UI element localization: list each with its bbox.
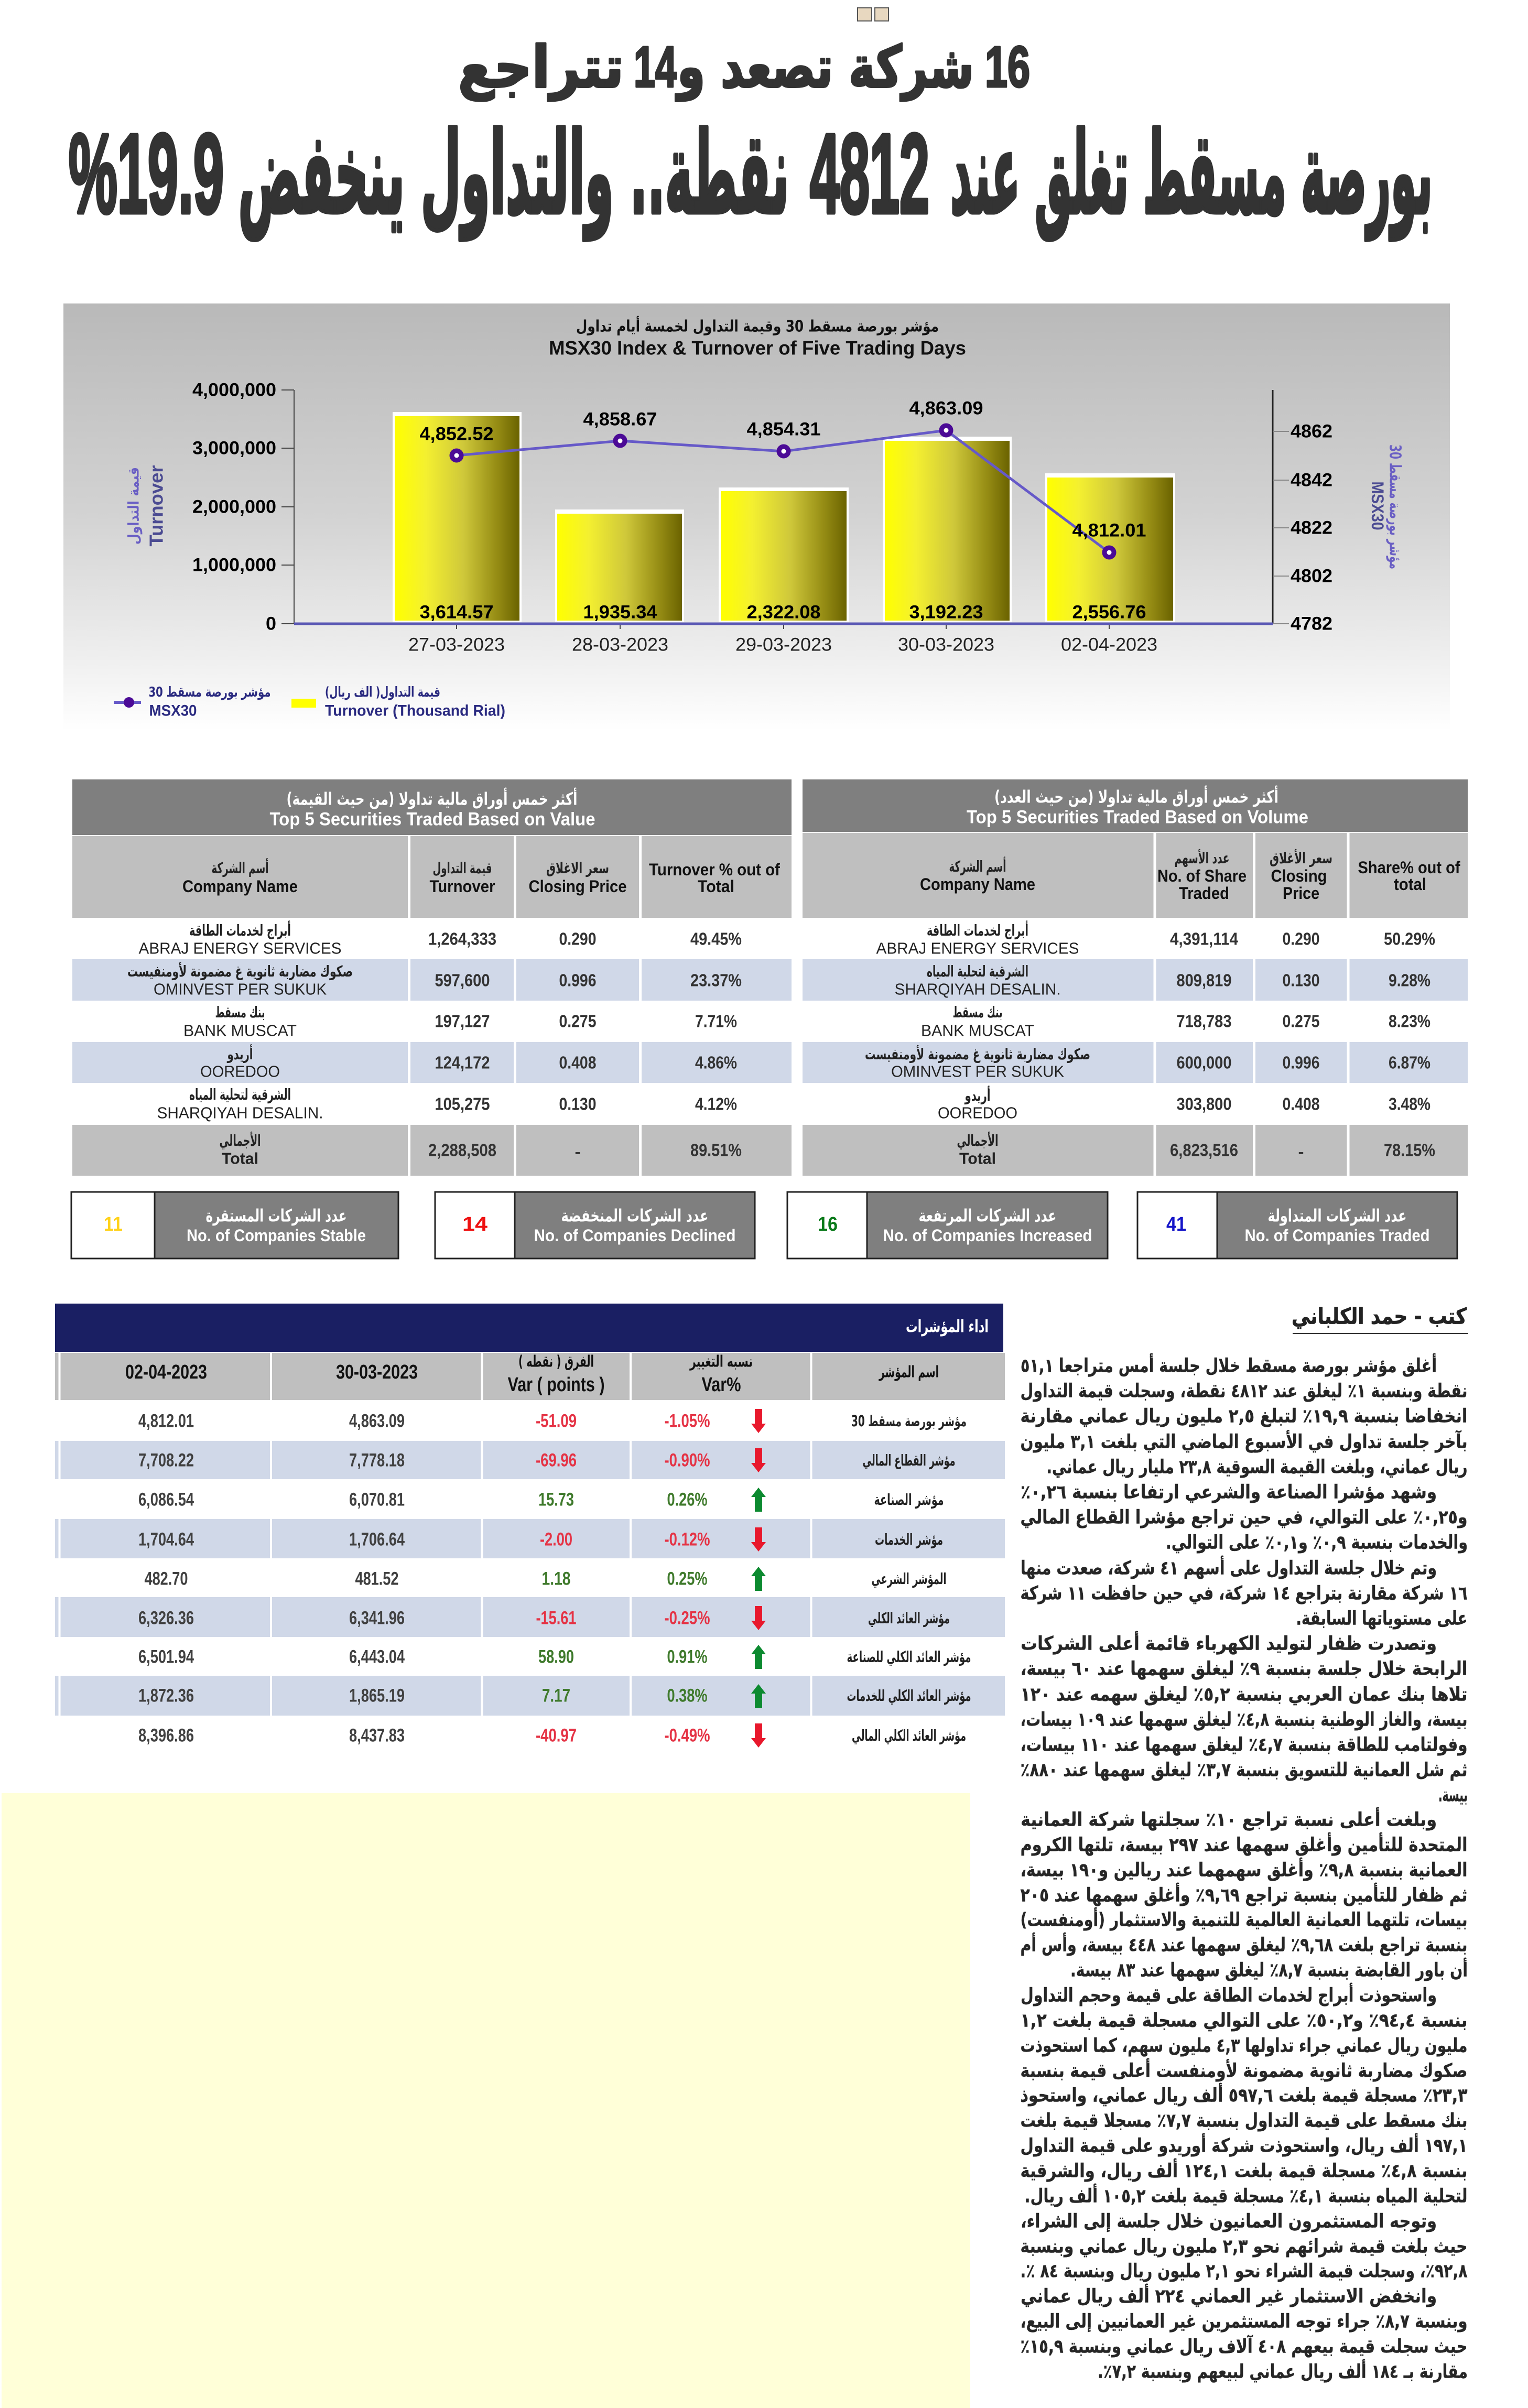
table title: Top 5 Securities Traded Based on Value xyxy=(269,809,595,829)
percent variation positive xyxy=(667,1490,708,1706)
icons: down arrows xyxy=(751,1409,766,1748)
legend: turnover: Turnover (Thousand Rial) xyxy=(325,702,505,719)
column headers arabic: قيمة التداول xyxy=(433,859,492,877)
values: 124,172 xyxy=(435,1053,490,1072)
stat box: companies increased: 16 xyxy=(818,1213,838,1235)
article text: first column block: تلاها بنك عمان العربي بنسبة ٥,٢٪ ليغلق سهمه عند ١٢٠ xyxy=(1020,1684,1468,1706)
points variation negative: -69.96 xyxy=(536,1450,577,1471)
title: headline line one: تتراجع xyxy=(458,34,624,101)
values: 0.290 xyxy=(559,929,597,949)
values: - xyxy=(1298,1142,1304,1162)
company names english: BANK MUSCAT xyxy=(921,1021,1034,1040)
values: 0.130 xyxy=(559,1094,597,1113)
article text: first column block: انخفاضا بنسبة ١٩,٩٪ لتبلغ ٢,٥ مليون ريال عماني مقارنة xyxy=(1021,1406,1468,1427)
icon: top ornament xyxy=(858,8,888,21)
right axis labels: 4842 xyxy=(1291,470,1332,491)
column headers: Total xyxy=(698,877,734,896)
column headers arabic xyxy=(212,858,609,877)
article text: first column block: على مستوياتها السابقة. xyxy=(1296,1608,1468,1629)
column headers arabic: عدد الأسهم xyxy=(1174,849,1230,867)
company names arabic: الأجمالي xyxy=(957,1131,998,1149)
column headers: total xyxy=(1394,875,1426,894)
panel: pale yellow block xyxy=(2,1793,970,2408)
index names: مؤشر العائد الكلي للخدمات xyxy=(847,1687,971,1705)
values: 303,800 xyxy=(1176,1094,1232,1113)
article text: second block: ١٩٧,١ ألف ريال، واستحوذت شركة أوريدو على قيمة التداول xyxy=(1020,2133,1468,2156)
values 02-04-2023: 7,708.22 xyxy=(138,1450,194,1471)
article text: second block: ثم ظفار للتأمين بنسبة تراجع ٩,٦٩٪ وأغلق سهمها عند ٢٠٥ xyxy=(1020,1883,1468,1906)
column headers: نسبه التغيير xyxy=(689,1352,753,1371)
stat box: companies stable: No. of Companies Stable xyxy=(187,1226,366,1245)
values 02-04-2023: 1,704.64 xyxy=(138,1530,194,1549)
company names arabic: أريدو xyxy=(964,1086,991,1104)
article text: second block: ٢٣,٣٪ مسجلة قيمة بلغت ٥٩٧,٦ ألف ريال عماني، واستحوذ xyxy=(1020,2083,1468,2106)
stat box: companies declined: 14 xyxy=(462,1213,487,1235)
values 02-04-2023: 6,326.36 xyxy=(138,1608,194,1628)
company names english xyxy=(876,939,1079,1168)
column headers: Company Name xyxy=(920,875,1035,894)
percent variation positive: 0.26% xyxy=(667,1490,708,1510)
points variation negative xyxy=(536,1411,577,1745)
company names arabic: أبراج لخدمات الطاقة xyxy=(927,920,1028,939)
company names english: ABRAJ ENERGY SERVICES xyxy=(138,939,342,957)
values xyxy=(1170,929,1435,1162)
column headers: Traded xyxy=(1179,884,1229,903)
points variation positive: 58.90 xyxy=(538,1647,574,1667)
article text: second block: ٩٢,٨٪، وسجلت قيمة الشراء نحو ٢,١ مليون ريال وبنسبة ٨٤ ٪. xyxy=(1020,2260,1468,2282)
company names english: OMINVEST PER SUKUK xyxy=(891,1062,1064,1081)
values: 105,275 xyxy=(435,1094,490,1113)
article text: second block: وبلغت أعلى نسبة تراجع ١٠٪ سجلتها شركة العمانية xyxy=(1021,1807,1437,1830)
stat box: companies declined xyxy=(435,1192,755,1259)
company names english xyxy=(138,939,342,1168)
values: 6,823,516 xyxy=(1170,1141,1238,1159)
company names english: Total xyxy=(959,1149,996,1168)
table title xyxy=(269,787,595,829)
company names english: SHARQIYAH DESALIN. xyxy=(894,980,1061,998)
stat box: companies traded xyxy=(1137,1192,1457,1259)
turnover value labels: 3,614.57 xyxy=(419,602,494,623)
turnover value labels: 1,935.34 xyxy=(583,602,657,623)
company names arabic xyxy=(865,920,1090,1149)
article text: second block: المتحدة للتأمين وأغلق سهمها عند ٢٩٧ بيسة، تلتها الكروم xyxy=(1020,1832,1468,1856)
title: headline line one: 16 xyxy=(985,35,1030,100)
values: 78.15% xyxy=(1384,1141,1435,1159)
values: 718,783 xyxy=(1176,1012,1232,1031)
date labels: 28-03-2023 xyxy=(572,634,668,655)
article text: second block: وتوجه المستثمرون العمانيون خلال جلسة إلى الشراء، xyxy=(1021,2211,1437,2232)
article text: first column block: بيسة، والغاز الوطنية بنسبة ٤,٨٪ ليغلق سهمها عند ١٠٩ بيسات، xyxy=(1020,1709,1468,1731)
title: headline line one xyxy=(458,34,1030,101)
values: 3.48% xyxy=(1389,1094,1431,1113)
values: 0.408 xyxy=(1282,1094,1320,1113)
percent variation negative xyxy=(665,1411,710,1745)
column headers arabic: سعر الاغلاق xyxy=(546,859,609,877)
points variation positive xyxy=(538,1490,574,1706)
values 30-03-2023: 4,863.09 xyxy=(349,1411,405,1431)
values 30-03-2023: 8,437.83 xyxy=(349,1726,405,1745)
date labels: 30-03-2023 xyxy=(898,634,994,655)
right axis title: MSX30 xyxy=(1368,481,1387,530)
title: headline line one: 14 xyxy=(634,35,677,100)
stat box: companies declined: عدد الشركات المنخفضة xyxy=(561,1206,709,1227)
values: 4.12% xyxy=(695,1094,737,1113)
company names arabic: أبراج لخدمات الطاقة xyxy=(189,920,291,939)
points variation negative: -40.97 xyxy=(536,1726,577,1745)
article text: first column block: والخدمات بنسبة ٠,٩٪ و٠,١٪ على التوالي. xyxy=(1166,1532,1468,1554)
values 02-04-2023 xyxy=(138,1411,194,1745)
values: 50.29% xyxy=(1384,929,1435,949)
left axis labels: 3,000,000 xyxy=(192,438,276,458)
bar: 27-03-2023 xyxy=(393,412,522,622)
index value labels xyxy=(419,398,1146,541)
points variation positive: 1.18 xyxy=(542,1568,570,1589)
right axis title: مؤشر بورصة مسقط 30 xyxy=(1386,444,1404,569)
values 30-03-2023: 6,443.04 xyxy=(349,1647,405,1667)
article text: first column block: نقطة وبنسبة ١٪ ليغلق عند ٤٨١٢ نقطة، وسجلت قيمة التداول xyxy=(1020,1381,1468,1402)
legend: turnover xyxy=(291,685,505,719)
percent variation positive: 0.91% xyxy=(667,1647,708,1667)
date labels: 27-03-2023 xyxy=(408,634,505,655)
column headers arabic: أسم الشركة xyxy=(212,858,268,877)
article text: first column block: ١٦ شركة مقارنة بتراجع ١٤ شركة، في حين حافظت ١١ شركة xyxy=(1020,1583,1468,1604)
values: 6.87% xyxy=(1389,1053,1431,1072)
values 02-04-2023: 4,812.01 xyxy=(138,1411,194,1431)
table title: أكثر خمس أوراق مالية تداولا (من حيث القيمة) xyxy=(286,787,578,809)
column headers: Turnover % out of xyxy=(649,860,780,879)
values: 0.130 xyxy=(1282,971,1320,990)
panel: top 5 by value table xyxy=(72,779,792,1176)
article text: second block: بنسبة تراجع بلغت ٩,٦٨٪ ليغلق سهمها عند ٤٤٨ بيسة، وأس أم xyxy=(1020,1932,1468,1956)
right axis labels: 4802 xyxy=(1291,566,1332,586)
company names english: BANK MUSCAT xyxy=(183,1021,297,1040)
chart title xyxy=(549,316,966,359)
column headers: 02-04-2023 xyxy=(125,1361,207,1383)
column headers: Var ( points ) xyxy=(507,1374,605,1396)
index value labels: 4,863.09 xyxy=(909,398,983,418)
stat box: companies traded: عدد الشركات المتداولة xyxy=(1267,1206,1407,1227)
stat box: companies increased: No. of Companies Increased xyxy=(883,1226,1092,1245)
values: 4.86% xyxy=(695,1053,737,1072)
company names arabic: بنك مسقط xyxy=(215,1003,265,1021)
company names arabic: بنك مسقط xyxy=(953,1003,1002,1021)
values: 49.45% xyxy=(690,929,742,949)
column headers: Turnover xyxy=(430,877,495,896)
values 30-03-2023 xyxy=(349,1411,405,1745)
article text: second block: وانخفض الاستثمار غير العماني ٢٢٤ ألف ريال عماني xyxy=(1021,2283,1437,2307)
right axis labels xyxy=(1291,421,1332,634)
turnover value labels: 2,556.76 xyxy=(1072,602,1146,623)
left axis labels: 1,000,000 xyxy=(192,555,276,576)
values: 89.51% xyxy=(690,1141,742,1159)
values 30-03-2023: 481.52 xyxy=(355,1568,398,1589)
column headers: الفرق ( نقطه ) xyxy=(518,1352,594,1371)
company names english: SHARQIYAH DESALIN. xyxy=(157,1104,323,1122)
values: 0.290 xyxy=(1282,929,1320,949)
index value labels: 4,812.01 xyxy=(1072,520,1146,541)
article text: first column block: بيسة. xyxy=(1438,1784,1468,1806)
percent variation negative: -1.05% xyxy=(665,1411,710,1431)
panel: top 5 by volume table xyxy=(803,779,1468,1176)
chart axes xyxy=(281,390,1289,629)
values 02-04-2023: 8,396.86 xyxy=(138,1726,194,1745)
bar: 29-03-2023 xyxy=(719,487,849,622)
values xyxy=(428,929,742,1162)
left axis labels: 4,000,000 xyxy=(192,379,276,400)
turnover value labels: 3,192.23 xyxy=(909,602,983,623)
chart title: MSX30 Index & Turnover of Five Trading Days xyxy=(549,338,966,359)
values: 1,264,333 xyxy=(428,929,496,949)
index value labels: 4,852.52 xyxy=(419,424,494,444)
values: 4,391,114 xyxy=(1170,929,1239,949)
legend: turnover: قيمة التداول( الف ريال) xyxy=(325,685,440,700)
article text: first column block: الرابحة خلال جلسة بنسبة ٩٪ ليغلق سهمها عند ٦٠ بيسة، xyxy=(1020,1658,1468,1679)
table title: اداء المؤشرات xyxy=(906,1316,989,1337)
date labels xyxy=(408,634,1157,655)
index names: مؤشر العائد الكلي المالي xyxy=(852,1727,966,1744)
company names arabic: صكوك مضاربة ثانوية غ مضمونة لأومنفيست xyxy=(865,1045,1090,1063)
points variation negative: -2.00 xyxy=(540,1530,572,1549)
legend: MSX30 xyxy=(114,685,270,719)
article text: first column block: وفولتامب للطاقة بنسبة ٤,٧٪ ليغلق سهمها عند ١١٠ بيسات، xyxy=(1020,1734,1468,1756)
index value labels: 4,858.67 xyxy=(583,409,657,430)
values: 0.275 xyxy=(1282,1012,1320,1031)
turnover value labels xyxy=(419,602,1146,623)
points variation positive: 15.73 xyxy=(538,1490,574,1510)
percent variation negative: -0.12% xyxy=(665,1530,710,1549)
column headers xyxy=(920,858,1460,903)
column headers arabic xyxy=(949,849,1332,875)
article text: second block: لتحلية المياه بنسبة ٤,١٪ مسجلة قيمة بلغت ١٠٥,٢ ألف ريال. xyxy=(1024,2184,1468,2207)
column headers: 30-03-2023 xyxy=(336,1361,418,1383)
values: 197,127 xyxy=(435,1012,490,1031)
date labels: 02-04-2023 xyxy=(1061,634,1157,655)
article text: first column block: ثم شل العمانية للتسويق بنسبة ٣,٧٪ ليغلق سهمها عند ٨٨٠٪ xyxy=(1021,1759,1468,1781)
left axis labels xyxy=(192,379,276,634)
company names english: OOREDOO xyxy=(200,1062,280,1081)
values: 597,600 xyxy=(435,971,490,990)
table title: أكثر خمس أوراق مالية تداولا (من حيث العدد) xyxy=(994,785,1278,807)
values 30-03-2023: 7,778.18 xyxy=(349,1450,405,1471)
icons: up arrows xyxy=(751,1488,766,1708)
values 02-04-2023: 6,086.54 xyxy=(138,1490,194,1510)
percent variation negative: -0.25% xyxy=(665,1608,710,1628)
stat box: companies stable xyxy=(71,1192,398,1259)
stat box: companies traded: No. of Companies Traded xyxy=(1244,1226,1430,1245)
bar: 02-04-2023 xyxy=(1045,473,1175,622)
values: 8.23% xyxy=(1389,1012,1431,1031)
article text: first column block: أغلق مؤشر بورصة مسقط خلال جلسة أمس متراجعا ٥١,١ xyxy=(1021,1353,1437,1376)
bar: 30-03-2023 xyxy=(883,437,1012,622)
index names xyxy=(847,1412,971,1744)
column headers: Share% out of xyxy=(1358,858,1460,877)
points variation negative: -51.09 xyxy=(536,1411,577,1431)
column headers: No. of Share xyxy=(1157,866,1247,885)
company names arabic: الشرقية لتحلية المياه xyxy=(189,1086,291,1103)
right axis labels: 4822 xyxy=(1291,518,1332,538)
values: 0.408 xyxy=(559,1053,597,1072)
values: 0.996 xyxy=(559,971,597,990)
article text: second block: مقارنة بـ ١٨٤ ألف ريال عماني لبيعهم وبنسبة ٧,٢٪. xyxy=(1098,2359,1468,2383)
stat box: companies increased xyxy=(787,1192,1108,1259)
right axis labels: 4782 xyxy=(1291,613,1332,634)
table title: Top 5 Securities Traded Based on Volume xyxy=(967,807,1308,827)
table title xyxy=(967,785,1308,827)
index names: مؤشر الخدمات xyxy=(875,1531,943,1548)
column headers xyxy=(125,1352,939,1396)
values 02-04-2023: 482.70 xyxy=(145,1568,188,1589)
percent variation negative: -0.90% xyxy=(665,1450,710,1471)
values 02-04-2023: 6,501.94 xyxy=(138,1647,194,1667)
company names english: OMINVEST PER SUKUK xyxy=(154,980,327,998)
column headers: Closing Price xyxy=(528,877,627,896)
article text: first column block xyxy=(1020,1353,1468,1806)
article text: second block: وبنسبة ٨,٧٪ جراء توجه المستثمرين غير العمانيين إلى البيع، xyxy=(1020,2311,1468,2333)
article text: second block: بنسبة ٩٤,٤٪ و٥٠,٢٪ على التوالي مسجلة قيمة بلغت ١,٢ xyxy=(1020,2010,1468,2032)
percent variation positive: 0.38% xyxy=(667,1686,708,1706)
company names arabic: الأجمالي xyxy=(219,1131,261,1149)
legend: MSX30: مؤشر بورصة مسقط 30 xyxy=(148,685,270,700)
stat box: companies traded: 41 xyxy=(1166,1213,1186,1235)
article text: second block xyxy=(1020,1807,1468,2383)
stat box: companies declined: No. of Companies Declined xyxy=(534,1226,736,1245)
company names english: OOREDOO xyxy=(938,1104,1017,1122)
company names arabic: الشرقية لتحلية المياه xyxy=(927,962,1028,980)
date labels: 29-03-2023 xyxy=(735,634,832,655)
article text: first column block: و٠,٢٥٪ على التوالي، في حين تراجع مؤشرا القطاع المالي xyxy=(1020,1506,1468,1528)
values 30-03-2023: 6,070.81 xyxy=(349,1490,405,1510)
index names: المؤشر الشرعي xyxy=(871,1570,947,1588)
values: 2,288,508 xyxy=(428,1141,496,1159)
index names: مؤشر العائد الكلي للصناعة xyxy=(847,1648,971,1666)
values: 0.275 xyxy=(559,1012,597,1031)
company names english: ABRAJ ENERGY SERVICES xyxy=(876,939,1079,957)
article text: first column block: وتم خلال جلسة التداول على أسهم ٤١ شركة، صعدت منها xyxy=(1021,1556,1437,1579)
column headers: Var% xyxy=(701,1374,741,1396)
company names arabic xyxy=(127,920,353,1149)
panel: indices performance table xyxy=(55,1304,1005,1754)
article text: second block: حيث سجلت قيمة بيعهم ٤٠٨ آلاف ريال عماني وبنسبة ١٥,٩٪ xyxy=(1020,2335,1468,2358)
article text: second block: مليون ريال عماني جراء تداولها ٤,٣ مليون سهم، كما استحوذت xyxy=(1020,2035,1468,2057)
panel: MSX30 chart xyxy=(63,303,1450,731)
column headers xyxy=(182,860,780,896)
index names: مؤشر العائد الكلي xyxy=(868,1609,950,1627)
values: 23.37% xyxy=(690,971,742,990)
company names arabic: صكوك مضاربة ثانوية غ مضمونة لأومنفيست xyxy=(127,962,353,980)
article text: second block: حيث بلغت قيمة شرائهم نحو ٢,٣ مليون ريال عماني وبنسبة xyxy=(1020,2236,1468,2257)
points variation negative: -15.61 xyxy=(536,1608,577,1628)
column headers arabic: أسم الشركة xyxy=(949,856,1006,875)
values 30-03-2023: 1,865.19 xyxy=(349,1686,405,1706)
values: 809,819 xyxy=(1176,971,1232,990)
column headers: Price xyxy=(1283,884,1319,903)
left axis title xyxy=(125,465,167,546)
turnover value labels: 2,322.08 xyxy=(746,602,821,623)
values: - xyxy=(575,1142,581,1162)
column headers: Closing xyxy=(1271,866,1327,885)
points variation positive: 7.17 xyxy=(542,1686,570,1706)
values 30-03-2023: 1,706.64 xyxy=(349,1530,405,1549)
column headers: Company Name xyxy=(182,877,298,896)
stat box: companies increased: عدد الشركات المرتفعة xyxy=(918,1206,1057,1227)
chart title: مؤشر بورصة مسقط 30 وقيمة التداول لخمسة أيام تداول xyxy=(576,316,939,335)
percent variation positive: 0.25% xyxy=(667,1568,708,1589)
column headers: اسم المؤشر xyxy=(879,1363,939,1382)
article text: first column block: وتصدرت ظفار لتوليد الكهرباء قائمة أعلى الشركات xyxy=(1021,1631,1437,1654)
values 30-03-2023: 6,341.96 xyxy=(349,1608,405,1628)
index names: مؤشر القطاع المالي xyxy=(863,1451,955,1469)
left axis labels: 0 xyxy=(266,613,276,634)
values: 9.28% xyxy=(1389,971,1431,990)
right axis labels: 4862 xyxy=(1291,421,1332,441)
index names: مؤشر بورصة مسقط 30 xyxy=(851,1412,967,1430)
title: headline line two: 4812 xyxy=(810,110,929,237)
legend: MSX30: MSX30 xyxy=(149,702,197,719)
article text: second block: أن باور القابضة بنسبة ٨,٧٪ ليغلق سهمها عند ٨٣ بيسة. xyxy=(1070,1957,1468,1981)
left axis title: Turnover xyxy=(146,465,167,546)
article text: second block: العمانية بنسبة ٩,٨٪ وأغلق سهمهما عند ريالين و١٩٠ بيسة، xyxy=(1020,1858,1468,1881)
company names english: Total xyxy=(222,1149,258,1168)
title: headline line two: %19.9 xyxy=(69,110,224,237)
index names: مؤشر الصناعة xyxy=(874,1491,944,1509)
values: 0.996 xyxy=(1282,1053,1320,1072)
company names arabic: أريدو xyxy=(226,1044,253,1063)
values: 600,000 xyxy=(1176,1053,1232,1072)
article text: first column block: وشهد مؤشرا الصناعة والشرعي ارتفاعا بنسبة ٠,٢٦٪ xyxy=(1021,1481,1437,1503)
index value labels: 4,854.31 xyxy=(746,419,821,439)
bar: 28-03-2023 xyxy=(555,509,684,622)
title: headline line one: شركة تصعد و xyxy=(675,34,974,101)
left axis title: قيمة التداول xyxy=(125,467,143,545)
stat box: companies stable: 11 xyxy=(104,1213,123,1235)
column headers arabic: سعر الأغلاق xyxy=(1270,849,1332,867)
percent variation negative: -0.49% xyxy=(665,1726,710,1745)
article text: second block: بنسبة ٤,٨٪ مسجلة قيمة بلغت ١٢٤,١ ألف ريال، والشرقية xyxy=(1021,2158,1468,2182)
stat box: companies stable: عدد الشركات المستقرة xyxy=(205,1206,347,1227)
right axis title xyxy=(1368,444,1404,569)
left axis labels: 2,000,000 xyxy=(192,497,276,517)
byline: كتب - حمد الكلباني xyxy=(1292,1303,1467,1329)
index line xyxy=(452,426,1114,557)
values 02-04-2023: 1,872.36 xyxy=(138,1686,194,1706)
values: 7.71% xyxy=(695,1012,737,1031)
article text: second block: بنك مسقط على قيمة التداول بنسبة ٧,٧٪ مسجلا قيمة بلغت xyxy=(1020,2110,1468,2131)
